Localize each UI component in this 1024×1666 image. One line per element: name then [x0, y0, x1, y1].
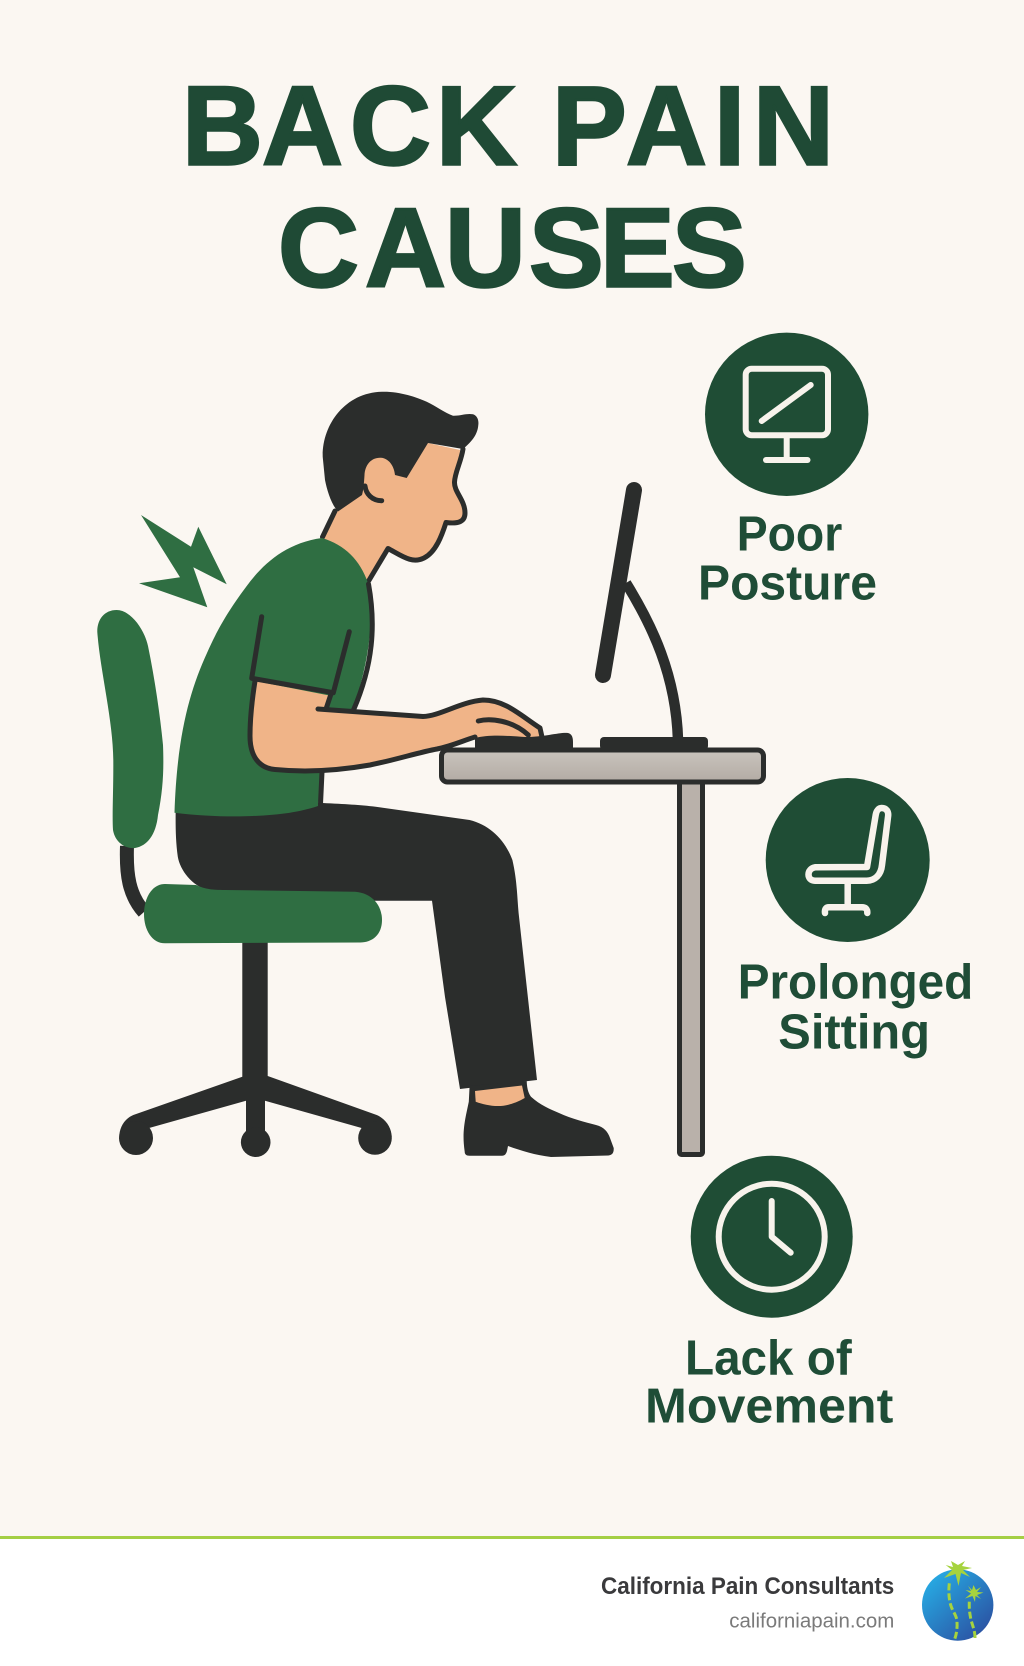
panel: prolonged sitting — [738, 778, 973, 1059]
monitor — [600, 490, 708, 750]
hair — [323, 392, 478, 512]
label: prolonged sitting — [738, 955, 973, 1059]
keyboard — [475, 733, 573, 750]
icon: pain lightning bolt — [139, 515, 227, 607]
ankle and shoe — [464, 1081, 614, 1157]
brand name: California Pain Consultants — [601, 1573, 894, 1600]
label: poor posture: Poor — [737, 508, 842, 562]
label: prolonged sitting: Sitting — [778, 1005, 930, 1059]
chair seat — [144, 884, 382, 943]
title — [182, 64, 834, 310]
icon: clock — [691, 1156, 853, 1318]
chair — [97, 610, 392, 1157]
icon: monitor — [705, 333, 868, 496]
face outline — [322, 449, 465, 582]
label: lack of movement: Lack of — [685, 1331, 852, 1385]
icon: logo globe with palms — [922, 1561, 993, 1641]
title: CAUSES — [278, 186, 747, 310]
label: lack of movement — [645, 1331, 893, 1434]
t-shirt — [174, 538, 371, 816]
desk — [442, 750, 764, 1154]
panel: poor posture — [698, 333, 877, 610]
shirt and arm outlines — [250, 584, 542, 804]
label: poor posture: Posture — [698, 556, 877, 610]
footer — [0, 1536, 1024, 1666]
pants — [176, 803, 537, 1089]
icon: chair — [766, 778, 930, 942]
face and neck — [322, 443, 463, 582]
illustration: seated man at desk — [97, 392, 763, 1157]
title: BACK PAIN — [182, 64, 834, 188]
arm — [250, 681, 542, 772]
website: californiapain.com — [729, 1609, 894, 1632]
label: poor posture — [698, 508, 877, 610]
label: prolonged sitting: Prolonged — [738, 955, 973, 1009]
label: lack of movement: Movement — [645, 1380, 893, 1434]
panel: lack of movement — [645, 1156, 893, 1434]
